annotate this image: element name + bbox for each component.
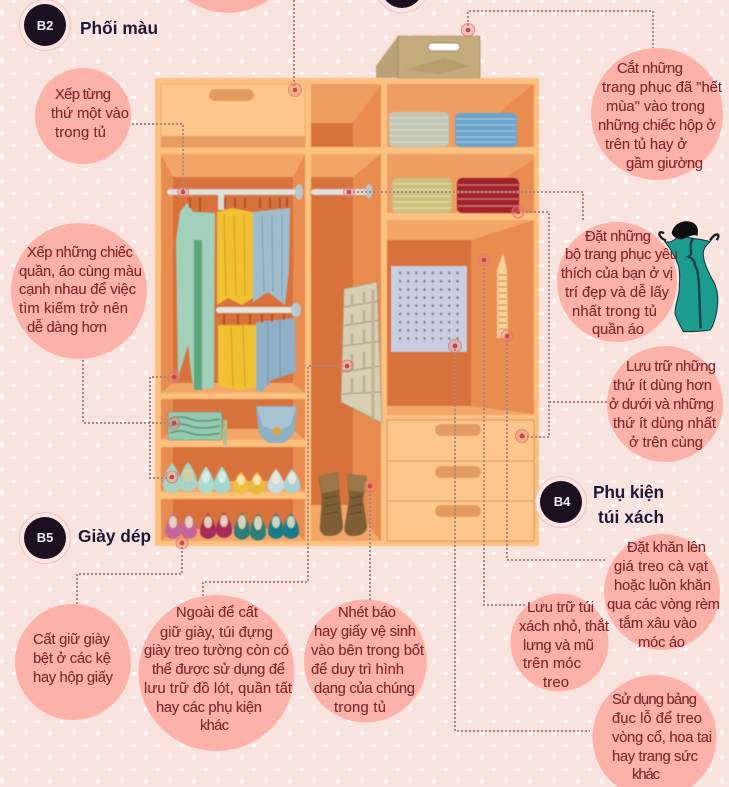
callout: lưu trữ túi xách: xách nhỏ, thắt xyxy=(519,618,609,635)
callout: túi đựng giày treo tường: giày treo tường còn có xyxy=(144,643,289,659)
callout: cất trang phục hết mùa: trang phục đã "hết xyxy=(602,80,722,96)
top middle compartment xyxy=(311,84,381,147)
callout: bảng đục lỗ xyxy=(592,675,716,787)
callout: túi đựng giày treo tường: thể được sử dụng để xyxy=(152,662,285,678)
heading: Phụ kiện túi xách xyxy=(593,482,664,527)
callout: cất trang phục hết mùa: Cắt những xyxy=(617,60,683,77)
callout: bảng đục lỗ: đục lỗ để treo xyxy=(612,710,702,727)
top right compartment xyxy=(387,84,534,147)
callout: túi đựng giày treo tường: khác xyxy=(200,718,230,734)
callout: lưu trữ túi xách: treo xyxy=(543,675,569,691)
callout: trang phục yêu thích: nhất trong tủ xyxy=(572,304,657,320)
callout: cất giữ giày bệt xyxy=(15,604,131,720)
callout: bảng đục lỗ: Sử dụng bảng xyxy=(612,692,697,708)
callout: trang phục yêu thích: Đặt những xyxy=(585,229,651,245)
callout: cất trang phục hết mùa: gầm giường xyxy=(626,156,703,172)
callout: trang phục yêu thích: thích của bạn ở vị xyxy=(561,266,673,282)
callout: lưu trữ túi xách xyxy=(510,594,609,692)
storage box on top xyxy=(376,36,480,78)
hanging rail and clothes, lower xyxy=(216,303,301,392)
folded clothes xyxy=(389,112,519,213)
callout: xếp cùng màu: Xếp những chiếc xyxy=(27,245,134,261)
callout: bảng đục lỗ: khác xyxy=(632,767,661,783)
callout: túi đựng giày treo tường: hay các phụ kiện xyxy=(156,700,262,716)
callout: nhét báo xyxy=(304,600,427,722)
callout: trang phục yêu thích: quần áo xyxy=(592,322,644,338)
callout: trang phục yêu thích xyxy=(557,221,718,342)
callout: nhét báo: Nhét báo xyxy=(338,605,396,621)
top storage box compartment xyxy=(161,84,305,147)
callout: túi đựng giày treo tường xyxy=(138,595,294,751)
left lower shelves xyxy=(161,399,305,541)
tie rack xyxy=(497,253,508,338)
hanging compartment xyxy=(161,154,305,393)
badge B2: B2 xyxy=(37,18,53,33)
callout: thứ ít dùng xyxy=(607,346,723,462)
callout: nhét báo: dạng của chúng xyxy=(314,681,415,697)
badge B5: B5 xyxy=(37,530,53,545)
callout: trang phục yêu thích: trí đẹp và dễ lấy xyxy=(565,284,670,301)
callout: nhét báo: hay giấy vệ sinh xyxy=(314,624,416,640)
heading: Phụ kiện túi xách: Phụ kiện xyxy=(593,482,664,502)
wardrobe xyxy=(155,78,539,546)
middle tall compartment xyxy=(311,154,381,541)
callout: xếp từng thứ: trong tủ xyxy=(55,125,106,141)
callout: xếp cùng màu: dễ dàng hơn xyxy=(27,319,107,336)
callout: đặt khăn xyxy=(604,534,720,651)
callout: cất giữ giày bệt: hay hộp giấy xyxy=(33,670,114,686)
callout: thứ ít dùng: thứ ít dùng nhất xyxy=(613,416,716,432)
callout: lưu trữ túi xách: Lưu trữ túi xyxy=(527,600,594,616)
callout: nhét báo: trong tủ xyxy=(334,700,386,716)
callout: xếp cùng màu: cạnh nhau để việc xyxy=(19,282,137,298)
heading: Phối màu: Phối màu xyxy=(80,18,158,38)
hanging shoe organiser xyxy=(341,282,382,423)
callout: thứ ít dùng: Lưu trữ những xyxy=(626,359,716,375)
badge B4 xyxy=(536,476,586,528)
callout: thứ ít dùng: ở dưới và những xyxy=(609,397,714,413)
callout: lưu trữ túi xách: lưng và mũ xyxy=(523,638,594,654)
callout: trang phục yêu thích: bộ trang phục yêu xyxy=(565,247,678,263)
callout: nhét báo: vào bên trong bốt xyxy=(311,643,424,659)
handbag xyxy=(256,406,297,443)
right lower compartment xyxy=(387,220,534,415)
partial badge at top xyxy=(376,0,428,13)
callout: túi đựng giày treo tường: Ngoài để cất xyxy=(176,605,258,621)
callout: cất trang phục hết mùa: những chiếc hộp ở xyxy=(598,118,716,134)
callout: xếp từng thứ xyxy=(35,68,131,164)
callout: xếp từng thứ: thứ một vào xyxy=(51,106,129,122)
marker dots xyxy=(166,24,528,549)
connector lines xyxy=(77,0,653,731)
callout: bảng đục lỗ: hay trang sức xyxy=(612,749,699,765)
heading: Phụ kiện túi xách: túi xách xyxy=(598,507,664,527)
callout: đặt khăn: qua các vòng rèm xyxy=(607,597,720,613)
callout: đặt khăn: giá treo cà vạt xyxy=(614,559,708,575)
badge B5 xyxy=(20,512,70,564)
callout: cất giữ giày bệt: Cất giữ giày xyxy=(33,632,111,648)
callout: đặt khăn: Đặt khăn lên xyxy=(627,540,706,556)
callout: nhét báo: để duy trì hình xyxy=(311,662,404,678)
callout: thứ ít dùng: ở trên cùng xyxy=(629,435,703,451)
badge B4: B4 xyxy=(554,494,571,509)
hanging rail and clothes, top xyxy=(167,184,303,390)
right middle compartment xyxy=(387,154,534,213)
callout: thứ ít dùng: thứ ít dùng hơn xyxy=(613,378,712,394)
callout: túi đựng giày treo tường: giữ giày, túi đựng xyxy=(160,625,273,641)
callout: cất trang phục hết mùa: mùa" vào trong xyxy=(606,99,705,115)
callout: lưu trữ túi xách: trên móc xyxy=(523,656,582,672)
shoes bottom row xyxy=(165,512,299,540)
callout: đặt khăn: móc áo xyxy=(638,635,685,651)
icon: teal dress on mannequin xyxy=(659,221,718,332)
callout: cất trang phục hết mùa xyxy=(591,48,723,180)
heading: Giày dép: Giày dép xyxy=(78,526,151,546)
callout: cất giữ giày bệt: bệt ở các kệ xyxy=(33,651,111,667)
drawers xyxy=(387,420,534,541)
badge B2 xyxy=(20,0,70,50)
callout: đặt khăn: tắm xâu vào xyxy=(619,615,697,632)
callout: xếp cùng màu: quần, áo cùng màu xyxy=(19,264,142,280)
callout: cất trang phục hết mùa: trên tủ hay ở xyxy=(605,137,687,153)
boots xyxy=(318,472,367,536)
middle rail xyxy=(311,184,372,198)
partial callout circle at top xyxy=(158,0,298,13)
clutch xyxy=(168,412,227,445)
callout: xếp từng thứ: Xếp từng xyxy=(55,87,111,103)
callout: xếp cùng màu xyxy=(11,223,147,359)
pegboard xyxy=(391,266,467,352)
callout: túi đựng giày treo tường: lưu trữ đồ lót, quần tất xyxy=(144,681,292,697)
callout: bảng đục lỗ: vòng cổ, hoa tai xyxy=(612,730,712,746)
callout: xếp cùng màu: tìm kiếm trở nên xyxy=(19,301,128,317)
shoes top row xyxy=(163,462,300,494)
callout: đặt khăn: hoặc luồn khăn xyxy=(614,578,711,594)
